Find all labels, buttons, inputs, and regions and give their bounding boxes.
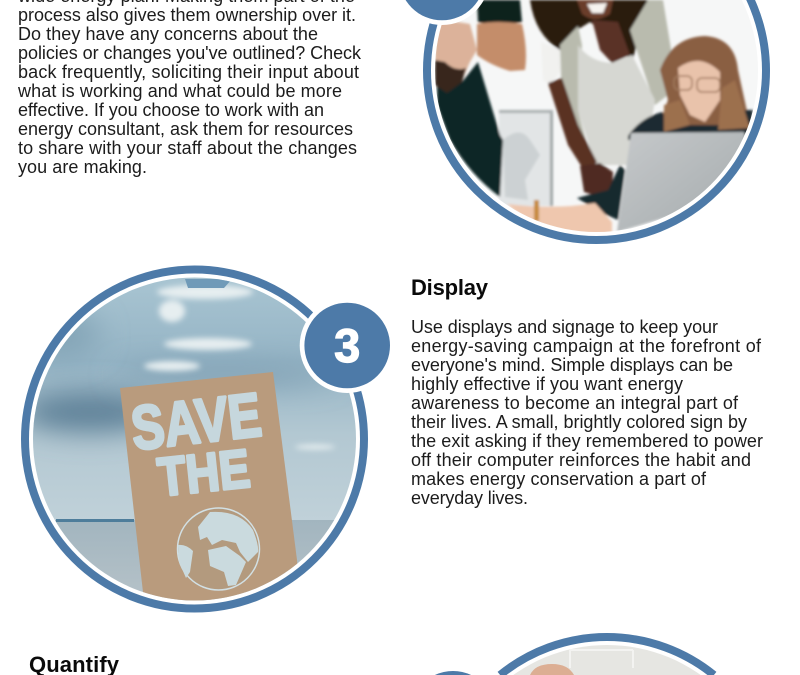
photo: team at laptop — [430, 0, 765, 236]
photo: protest sign over sea: THE — [155, 439, 253, 508]
text block: step 3 body: Use displays and signage to keep your — [411, 317, 718, 337]
text block: step 2 body: policies or changes you've outlined? Check — [18, 43, 362, 63]
text block: step 2 body — [17, 0, 362, 177]
ring: quantify photo — [500, 637, 714, 675]
text block: step 3 body: makes energy conservation a part of — [411, 469, 707, 489]
panel: team photo circle — [427, 0, 766, 240]
panel: save the earth photo circle — [20, 270, 364, 610]
text block: step 3 body: their lives. A small, brightly colored sign by — [411, 412, 747, 432]
text block: step 2 body: process also gives them ownership over it. — [18, 5, 356, 25]
photo: protest sign over sea — [20, 275, 360, 610]
ring: save the earth photo — [25, 270, 364, 608]
text block: step 3 body: awareness to become an integral part of — [411, 393, 739, 413]
badge: number 3 — [300, 298, 395, 393]
text block: step 2 body: effective. If you choose to work with an — [18, 100, 324, 120]
text block: step 3 body: everyday lives. — [411, 488, 528, 508]
text block: step 3 body: highly effective if you want energy — [411, 374, 683, 394]
icon: globe on sign — [178, 508, 260, 590]
photo: person by brick wall — [514, 645, 700, 675]
text block: step 2 body: to share with your staff about the changes — [18, 138, 357, 158]
badge: number 2 — [394, 0, 490, 25]
text block: step 2 body: back frequently, soliciting their input about — [18, 62, 359, 82]
heading: Display: Display — [411, 275, 489, 300]
text block: step 3 body: everyone's mind. Simple displays can be — [411, 355, 733, 375]
text block: step 3 body — [411, 317, 763, 508]
text block: step 3 body: off their computer reinforces the habit and — [411, 450, 751, 470]
badge: number 3: 3 — [334, 319, 360, 372]
panel: quantify photo circle — [490, 637, 725, 675]
photo: protest sign over sea: SAVE — [128, 381, 265, 464]
text block: step 2 body: energy consultant, ask them for resources — [18, 119, 353, 139]
text block: step 3 body: the exit asking if they remembered to power — [411, 431, 763, 451]
text block: step 3 body: energy-saving campaign at the forefront of — [411, 336, 762, 356]
text block: step 2 body: what is working and what could be more — [17, 81, 342, 101]
badge: number 4 — [426, 666, 480, 675]
ring: team photo — [427, 0, 766, 240]
text block: step 2 body: Do they have any concerns about the — [18, 24, 318, 44]
text block: step 2 body: you are making. — [18, 157, 147, 177]
